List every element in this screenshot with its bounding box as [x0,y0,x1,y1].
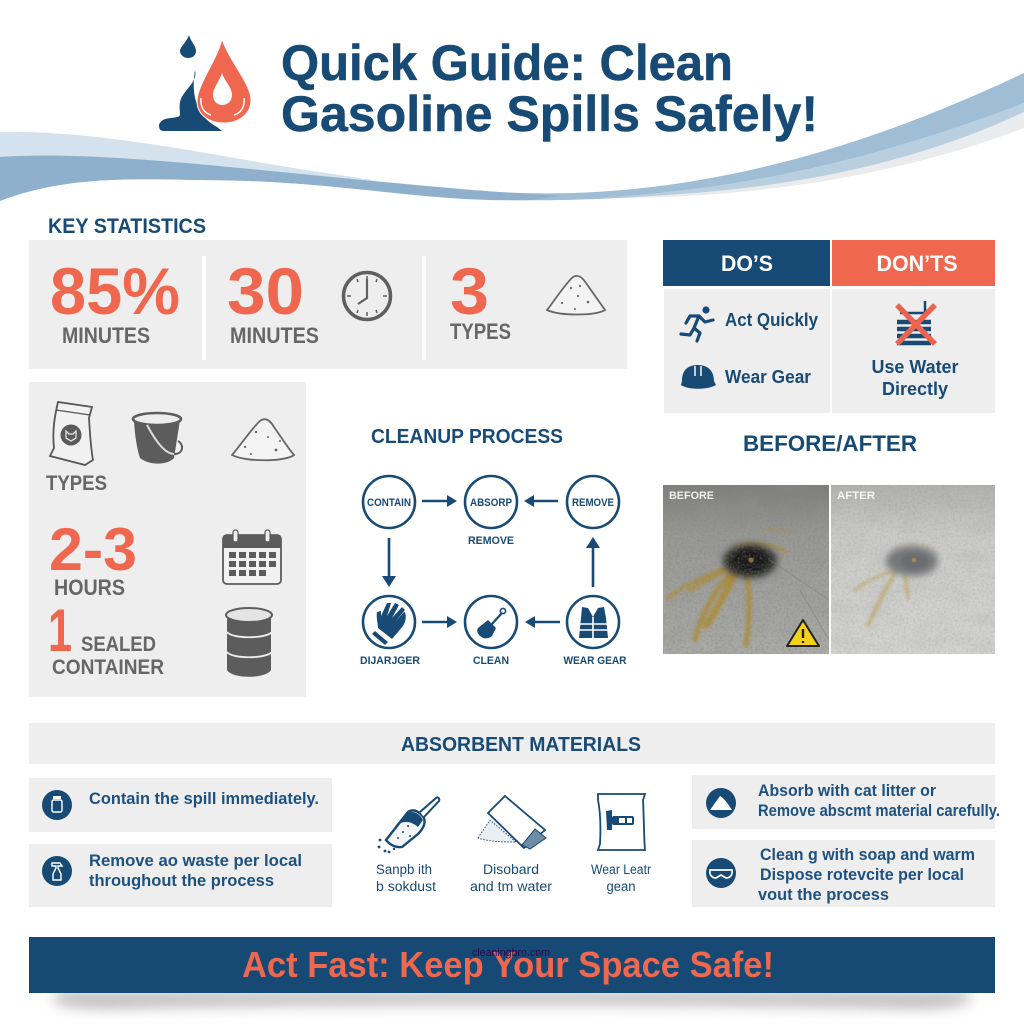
flow diagram: cleanup process: REMOVE [572,497,614,509]
stat: 85%: MINUTES [62,323,150,348]
icon: shovel [477,608,506,638]
label: before: BEFORE [669,490,714,502]
text: sand with sawdust [376,862,436,894]
tip: absorb with cat litter [692,775,1000,829]
flow diagram: cleanup process: REMOVE [468,535,514,547]
don'ts header [832,240,995,286]
photo: after [831,485,995,654]
heading: key statistics: KEY STATISTICS [48,215,206,238]
footer banner [29,937,995,993]
text: use water directly: Use Water [872,357,958,377]
icon: bag pouring powder [478,796,546,849]
flow diagram: cleanup process: DIJARJGER [360,655,420,667]
text [758,845,975,904]
stat: 30 minutes: MINUTES [230,323,319,348]
do's header: DO’S [721,251,773,276]
text: disobard and tm water: Disobard [483,862,539,877]
text [89,851,302,890]
section banner: absorbent materials [29,723,995,764]
flow diagram: cleanup process: ABSORP [470,497,512,509]
text: throughout the process [89,871,274,890]
text: wear leatr gean: Wear Leatr [591,862,651,877]
stat: 1 sealed container: CONTAINER [52,656,164,679]
section banner: absorbent materials: ABSORBENT MATERIALS [401,734,641,756]
text: disobard and tm water: and tm water [470,879,553,894]
flow diagram: cleanup process [360,476,627,667]
text: Clean g with soap and warm [760,845,975,864]
stat: 1 sealed container [48,597,164,679]
tip: contain the spill [29,778,332,832]
don'ts panel: Directly [882,379,948,399]
label: after: AFTER [837,490,875,502]
icon: clock [344,272,390,320]
text: vout the process [758,885,889,904]
panel: key statistics [29,240,627,369]
icon: drum barrel [226,608,272,677]
heading: cleanup process: CLEANUP PROCESS [371,426,563,448]
icon: pile badge [706,788,736,818]
label: types: TYPES [46,472,107,495]
icon: safety vest [579,607,608,638]
icon: glove [372,603,406,645]
do's panel [664,289,830,413]
flow diagram: cleanup process: CLEAN [473,655,509,667]
don'ts header: DON’TS [876,251,958,276]
icon: calendar [223,530,281,584]
icon: litter bag [50,402,93,465]
icon: absorbent bag [598,794,645,850]
text: act quickly: Act Quickly [725,310,818,330]
banner shadow [52,992,971,1008]
icon: bottle badge [42,790,72,820]
do's header [663,240,830,286]
flow diagram: cleanup process: CONTAIN [367,497,411,509]
icon: warning triangle [787,620,819,646]
tip: remove waste [29,844,332,907]
icon: sand pile [547,276,605,314]
logo: gasoline drop [159,35,251,131]
text [758,781,1000,820]
icon: spray bottle badge [42,856,72,886]
call to action: Act Fast: Keep Your Space Safe! [242,944,774,985]
icon: scoop with absorbent [378,797,439,853]
icon: runner [681,306,713,341]
stat: 3 types: TYPES [450,319,511,344]
text: wear leatr gean [591,862,651,894]
flow diagram: cleanup process: WEAR GEAR [564,655,627,667]
title: Gasoline Spills Safely! [281,86,818,142]
don'ts panel [832,289,995,413]
title: Quick Guide: Clean [281,35,733,91]
stat: 30 minutes: 30 [227,254,304,328]
stat: 30 minutes [227,254,319,348]
source watermark: cleaningbro.com [472,947,550,959]
text: wear leatr gean: gean [606,879,636,894]
icon: bucket [133,413,182,464]
icon: crossed-out water hose [897,301,935,344]
text: disobard and tm water [470,862,553,894]
text: Absorb with cat litter or [758,781,936,800]
text: sand with sawdust: Sanpb ith [376,862,432,877]
stat: 3 types: 3 [450,254,489,328]
stat: 1 sealed container: SEALED [81,633,156,656]
text: Remove ao waste per local [89,851,302,870]
icon: hard hat [681,365,716,389]
stat: 2-3 hours: HOURS [54,575,125,600]
stat: 2-3 hours: 2-3 [49,516,137,583]
heading: before/after: BEFORE/AFTER [743,431,917,456]
text: sand with sawdust: b sokdust [376,879,436,894]
stat: 1 sealed container: 1 [48,597,72,664]
tip: clean with soap [692,840,995,907]
text: Dispose rotevcite per local [760,865,964,884]
photo: before [663,485,829,654]
header wave [0,73,1024,201]
text: Contain the spill immediately. [89,789,319,808]
icon: goggles badge [706,858,736,888]
stat: 3 types [450,254,511,344]
panel: do's and don'ts [663,240,995,413]
text: wear gear: Wear Gear [725,367,811,387]
title [281,35,818,142]
panel: types, time, container [29,382,306,697]
stat: 85%: 85% [50,254,180,328]
icon: sand pile [232,419,294,460]
